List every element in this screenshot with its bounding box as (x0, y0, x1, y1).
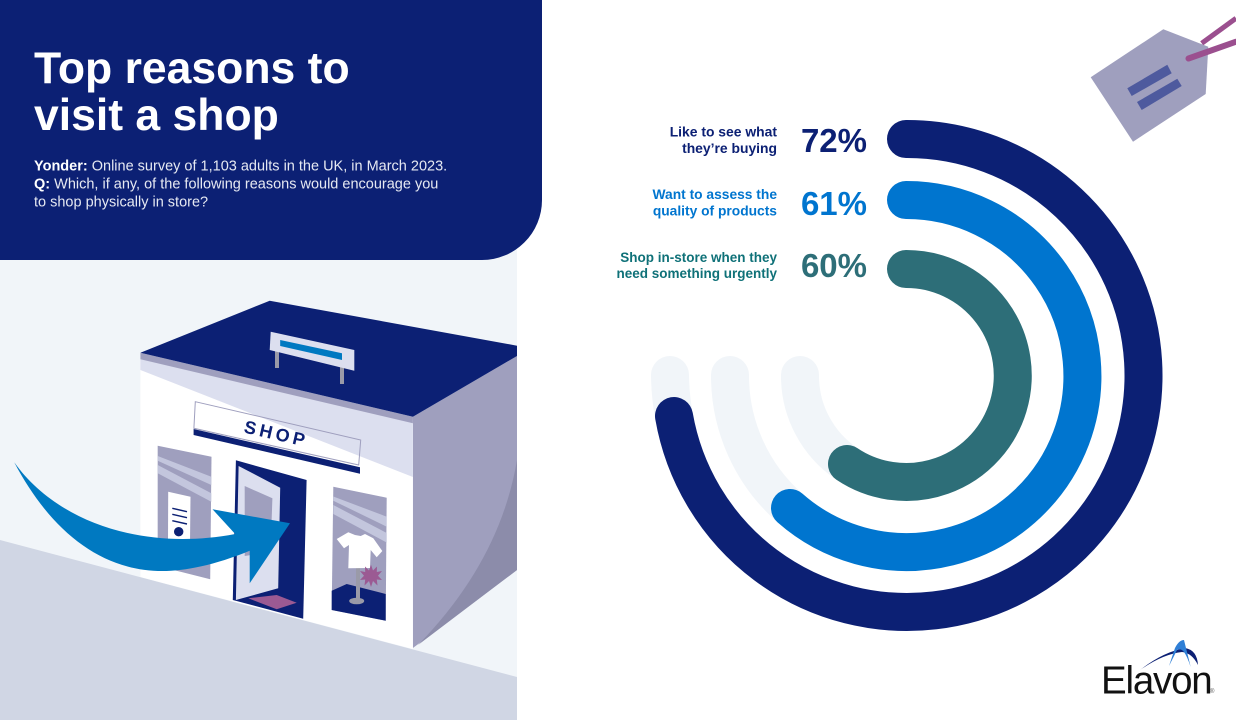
label: urgently: 60% (801, 247, 867, 284)
door (233, 460, 307, 619)
title: Top reasons to (34, 44, 350, 93)
rooftop sign (270, 332, 354, 384)
right window (332, 487, 387, 621)
shop illustration (140, 301, 517, 649)
ring: 72% (674, 139, 1144, 612)
ring: 61% (790, 200, 1082, 552)
survey description: Q: Which, if any, of the following reasons would encourage you (34, 177, 438, 193)
Elavon logo (1101, 640, 1215, 702)
label: assess quality: 61% (801, 185, 867, 222)
panel: header (0, 0, 542, 260)
left window (158, 446, 212, 579)
roof (140, 353, 413, 423)
arrow into shop (14, 462, 290, 583)
ring: 60% (847, 269, 1013, 482)
label: like to see: 72% (801, 122, 867, 159)
price tag icon (1091, 18, 1236, 142)
label: like to see: they’re buying (682, 140, 777, 156)
label: like to see: Like to see what (670, 124, 777, 140)
label: assess quality (653, 185, 867, 222)
Elavon logo: Elavon (1101, 659, 1212, 702)
panel: illustration background (0, 240, 517, 720)
Elavon logo: ® (1210, 688, 1215, 695)
survey description: Yonder: Online survey of 1,103 adults in the UK, in March 2023. (34, 158, 447, 174)
track arcs (670, 375, 847, 508)
label: urgently: need something urgently (616, 266, 777, 281)
label: urgently: Shop in-store when they (620, 250, 777, 265)
front wall (140, 355, 413, 649)
ground (0, 540, 517, 720)
title: visit a shop (34, 91, 279, 140)
radial bar chart (670, 139, 1144, 612)
label: urgently (616, 247, 867, 284)
survey description: to shop physically in store? (34, 195, 208, 211)
shop sign: SHOP (242, 417, 310, 451)
label: assess quality: Want to assess the (653, 187, 777, 202)
label: like to see (670, 122, 867, 159)
shop sign (194, 402, 361, 474)
label: assess quality: quality of products (653, 204, 777, 218)
side wall (413, 356, 517, 648)
